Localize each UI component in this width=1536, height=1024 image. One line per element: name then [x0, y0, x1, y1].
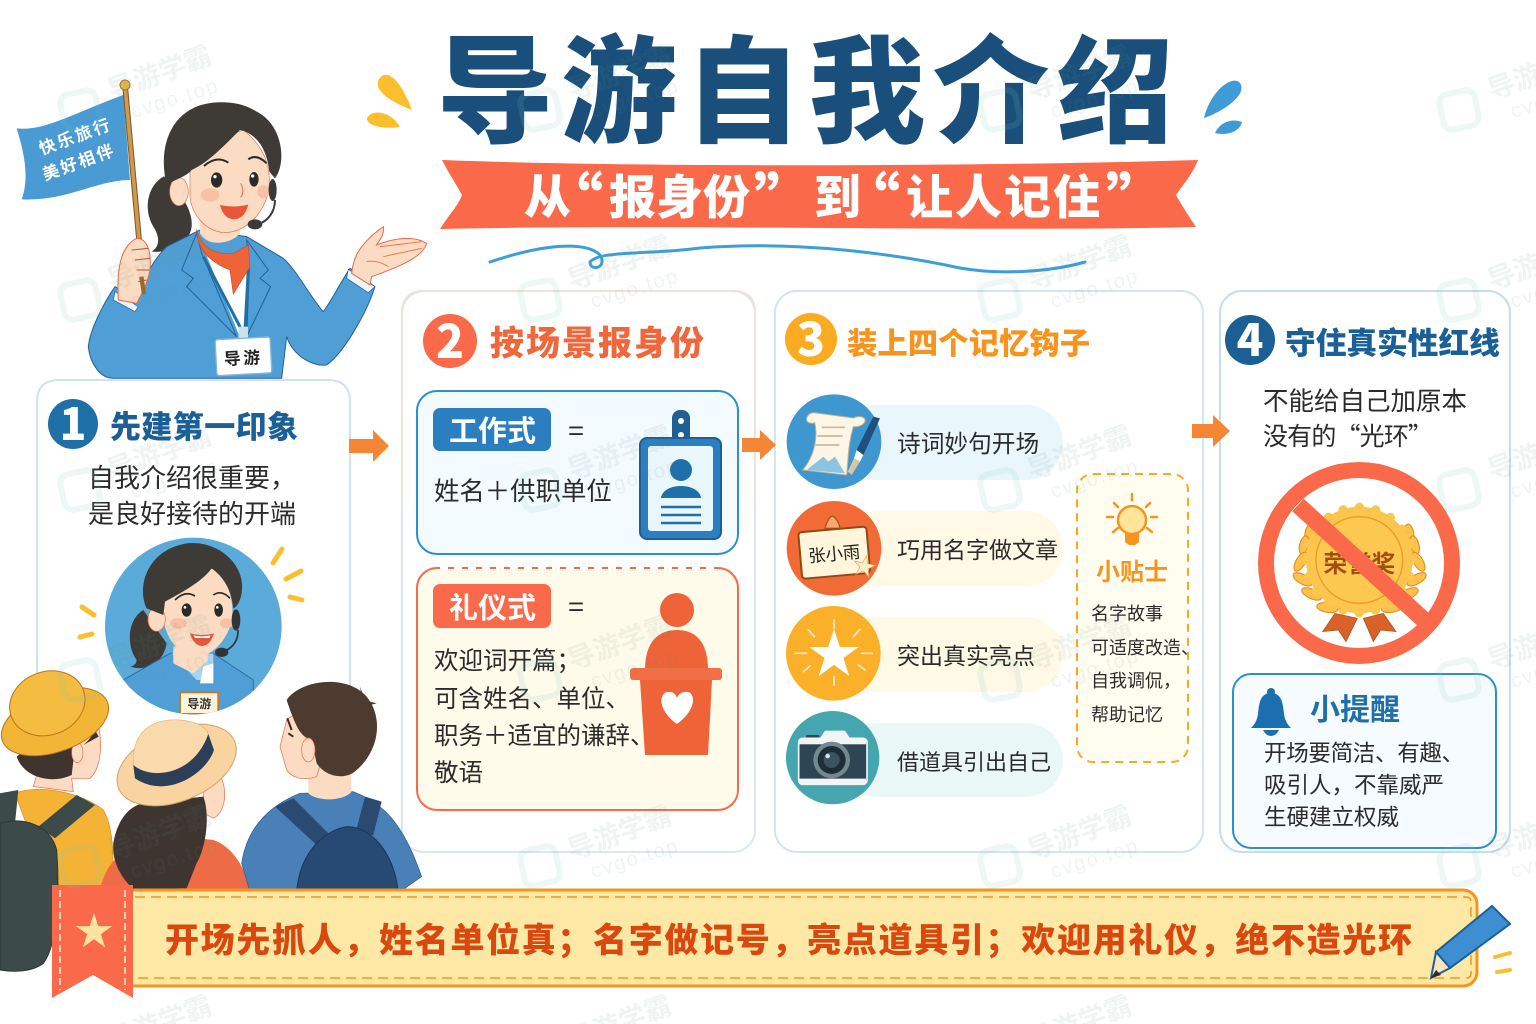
- icon: yellow sparks: [367, 75, 412, 128]
- ponytail: [148, 177, 192, 252]
- row: poetry: 诗词妙句开场: [897, 431, 1039, 458]
- illustration: guide portrait: [105, 538, 282, 717]
- icon: sparkle lines around portrait: [80, 549, 302, 637]
- arrow: panel 2 to 3: [742, 430, 776, 460]
- number 1: [48, 389, 98, 453]
- equals sign: =: [568, 410, 584, 450]
- text: 导游学霸: [1024, 611, 1136, 676]
- number 4: 4: [1237, 305, 1263, 369]
- row: true highlights: 突出真实亮点: [897, 643, 1035, 669]
- number 1: 1: [60, 389, 86, 453]
- arrow: panel 3 to 4: [1192, 415, 1230, 447]
- text: cvgo.top: [128, 645, 222, 693]
- text: 导游学霸: [564, 611, 676, 676]
- subtitle ribbon: 到: [814, 159, 861, 228]
- text: cvgo.top: [588, 835, 682, 883]
- heading: 装上四个记忆钩子: 装上四个记忆钩子: [847, 319, 1090, 363]
- heading: 小提醒: 小提醒: [1310, 685, 1400, 729]
- text: 导游学霸: [564, 41, 676, 106]
- panel: 1 first impression: [37, 380, 350, 700]
- icon: pencil: [1431, 906, 1510, 978]
- icon: speaker at podium: [630, 593, 722, 755]
- row: props: [786, 711, 1063, 804]
- illustration: guide portrait: 导游: [187, 695, 211, 712]
- text: reminder: 生硬建立权威: [1264, 805, 1399, 830]
- text: ceremony details: [434, 647, 654, 787]
- text: name + employer: 姓名＋供职单位: [434, 478, 612, 506]
- illustration: tourists: [0, 660, 422, 971]
- icon: star: [786, 606, 881, 701]
- text: 导游学霸: [564, 231, 676, 296]
- subtitle ribbon: ”: [1106, 154, 1166, 241]
- panel: 4 authenticity: [1220, 291, 1510, 852]
- subtitle ribbon: 从: [524, 159, 571, 228]
- row: poetry: [787, 394, 1063, 489]
- panel: 2 identity by scene: [402, 291, 755, 852]
- banner: summary mnemonic: 开场先抓人，姓名单位真；名字做记号，亮点道具引；欢迎用礼仪，绝不造光环: [165, 913, 1412, 962]
- face: [164, 102, 281, 233]
- icon: name sign: 张小雨: [807, 542, 861, 566]
- text: tips: 名字故事: [1091, 604, 1163, 624]
- text: cvgo.top: [128, 265, 222, 313]
- text: reminder: 吸引人，不靠威严: [1264, 773, 1444, 798]
- arrow: panel 1 to 2: [349, 430, 389, 462]
- icon: forbidden medal: 荣誉奖: [1323, 544, 1395, 579]
- text: ceremony details: 欢迎词开篇；: [434, 647, 581, 675]
- text: cvgo.top: [128, 835, 222, 883]
- text: 导游学霸: [1024, 41, 1136, 106]
- row: true highlights: [786, 606, 1063, 701]
- heading: 小贴士: 小贴士: [1096, 552, 1168, 587]
- shirt and lapels: [182, 233, 271, 339]
- row: props: 借道具引出自己: [897, 750, 1051, 775]
- tourist in blue shirt: [242, 682, 422, 892]
- hands and cuffs: [113, 227, 427, 312]
- text: cvgo.top: [588, 75, 682, 123]
- text: tips: 可适度改造、: [1091, 638, 1199, 658]
- tourist with straw hat: [100, 708, 250, 892]
- illustration: tour guide with flag: [17, 80, 427, 378]
- number 3: 3: [797, 304, 825, 370]
- callout: tips: [1077, 474, 1199, 762]
- tourist with yellow hat: [0, 660, 118, 971]
- name badge: [215, 337, 272, 376]
- icon: bookmark with star: [52, 885, 133, 998]
- flag: 美好相伴: [40, 140, 116, 184]
- tag: 礼仪式: 礼仪式: [449, 585, 536, 627]
- text: warning: 不能给自己加原本: [1263, 388, 1467, 416]
- heading: 守住真实性红线: 守住真实性红线: [1285, 318, 1500, 363]
- text: warning: [1263, 388, 1467, 453]
- text: 导游学霸: [104, 801, 216, 866]
- subtitle ribbon: 让人记住: [906, 159, 1102, 228]
- callout: reminder: [1233, 674, 1496, 848]
- text: ceremony details: 可含姓名、单位、: [434, 685, 630, 713]
- decorative wave: [490, 246, 1085, 272]
- text: reminder: 开场要简洁、有趣、: [1264, 741, 1464, 766]
- panel: 3 memory hooks: [775, 291, 1203, 852]
- icon: light bulb: [1107, 494, 1157, 545]
- number 4: [1225, 305, 1275, 369]
- text: cvgo.top: [128, 455, 222, 503]
- subtitle ribbon: “: [543, 154, 603, 241]
- text: cvgo.top: [588, 455, 682, 503]
- equals sign: =: [568, 586, 584, 626]
- box: ceremony style: [417, 568, 738, 810]
- flag: [17, 80, 144, 294]
- text: intro: 自我介绍很重要，: [88, 463, 296, 493]
- box: work style: [417, 391, 738, 554]
- text: ceremony details: 敬语: [434, 759, 483, 787]
- number 2: 2: [436, 306, 464, 372]
- subtitle ribbon: “: [840, 154, 900, 241]
- row: name play: [787, 501, 1063, 596]
- text: 导游学霸: [104, 41, 216, 106]
- text: 导游学霸: [1024, 421, 1136, 486]
- text: cvgo.top: [1048, 645, 1142, 693]
- text: warning: 没有的“光环”: [1263, 417, 1433, 453]
- icon: blue sparks: [1204, 81, 1242, 134]
- icon: name sign: [787, 501, 881, 596]
- text: 导游学霸: [1024, 801, 1136, 866]
- text: 导游学霸: [1024, 231, 1136, 296]
- tag: 工作式: 工作式: [449, 408, 536, 450]
- number 2: [423, 306, 477, 372]
- text: intro: [88, 463, 296, 529]
- row: name play: 巧用名字做文章: [897, 537, 1058, 563]
- neck: [200, 217, 240, 243]
- text: 导游学霸: [564, 421, 676, 486]
- icon: id badge: [640, 410, 721, 539]
- banner: summary mnemonic: [120, 890, 1477, 986]
- name badge: 导游: [223, 344, 263, 370]
- text: tips: 帮助记忆: [1091, 705, 1163, 725]
- title: 导游自我介绍: [437, 0, 1181, 167]
- text: cvgo.top: [128, 75, 222, 123]
- text: 导游学霸: [564, 801, 676, 866]
- text: cvgo.top: [1048, 835, 1142, 883]
- text: ceremony details: 职务＋适宜的谦辞、: [434, 722, 654, 750]
- text: cvgo.top: [1048, 265, 1142, 313]
- heading: 按场景报身份: 按场景报身份: [490, 316, 706, 365]
- subtitle ribbon: [440, 154, 1198, 241]
- subtitle ribbon: 报身份: [609, 159, 750, 228]
- heading: 先建第一印象: 先建第一印象: [110, 402, 298, 447]
- icon: scroll and pen: [787, 394, 881, 489]
- text: 导游学霸: [104, 611, 216, 676]
- text: intro: 是良好接待的开端: [88, 499, 296, 529]
- icon: bell: [1251, 688, 1291, 736]
- text: cvgo.top: [1048, 455, 1142, 503]
- text: cvgo.top: [588, 645, 682, 693]
- blue jacket: [88, 230, 375, 378]
- red scarf: [197, 229, 250, 294]
- text: 导游学霸: [104, 421, 216, 486]
- icon: camera: [786, 711, 879, 804]
- text: tips: 自我调侃，: [1091, 671, 1181, 691]
- text: cvgo.top: [1048, 75, 1142, 123]
- headset: [248, 179, 277, 229]
- icon: forbidden medal: [1266, 470, 1452, 656]
- text: tips: [1091, 604, 1199, 725]
- text: cvgo.top: [588, 265, 682, 313]
- text: reminder: [1264, 741, 1464, 830]
- text: 导游学霸: [104, 231, 216, 296]
- subtitle ribbon: ”: [754, 154, 814, 241]
- flag: 快乐旅行: [37, 116, 113, 159]
- number 3: [785, 304, 837, 370]
